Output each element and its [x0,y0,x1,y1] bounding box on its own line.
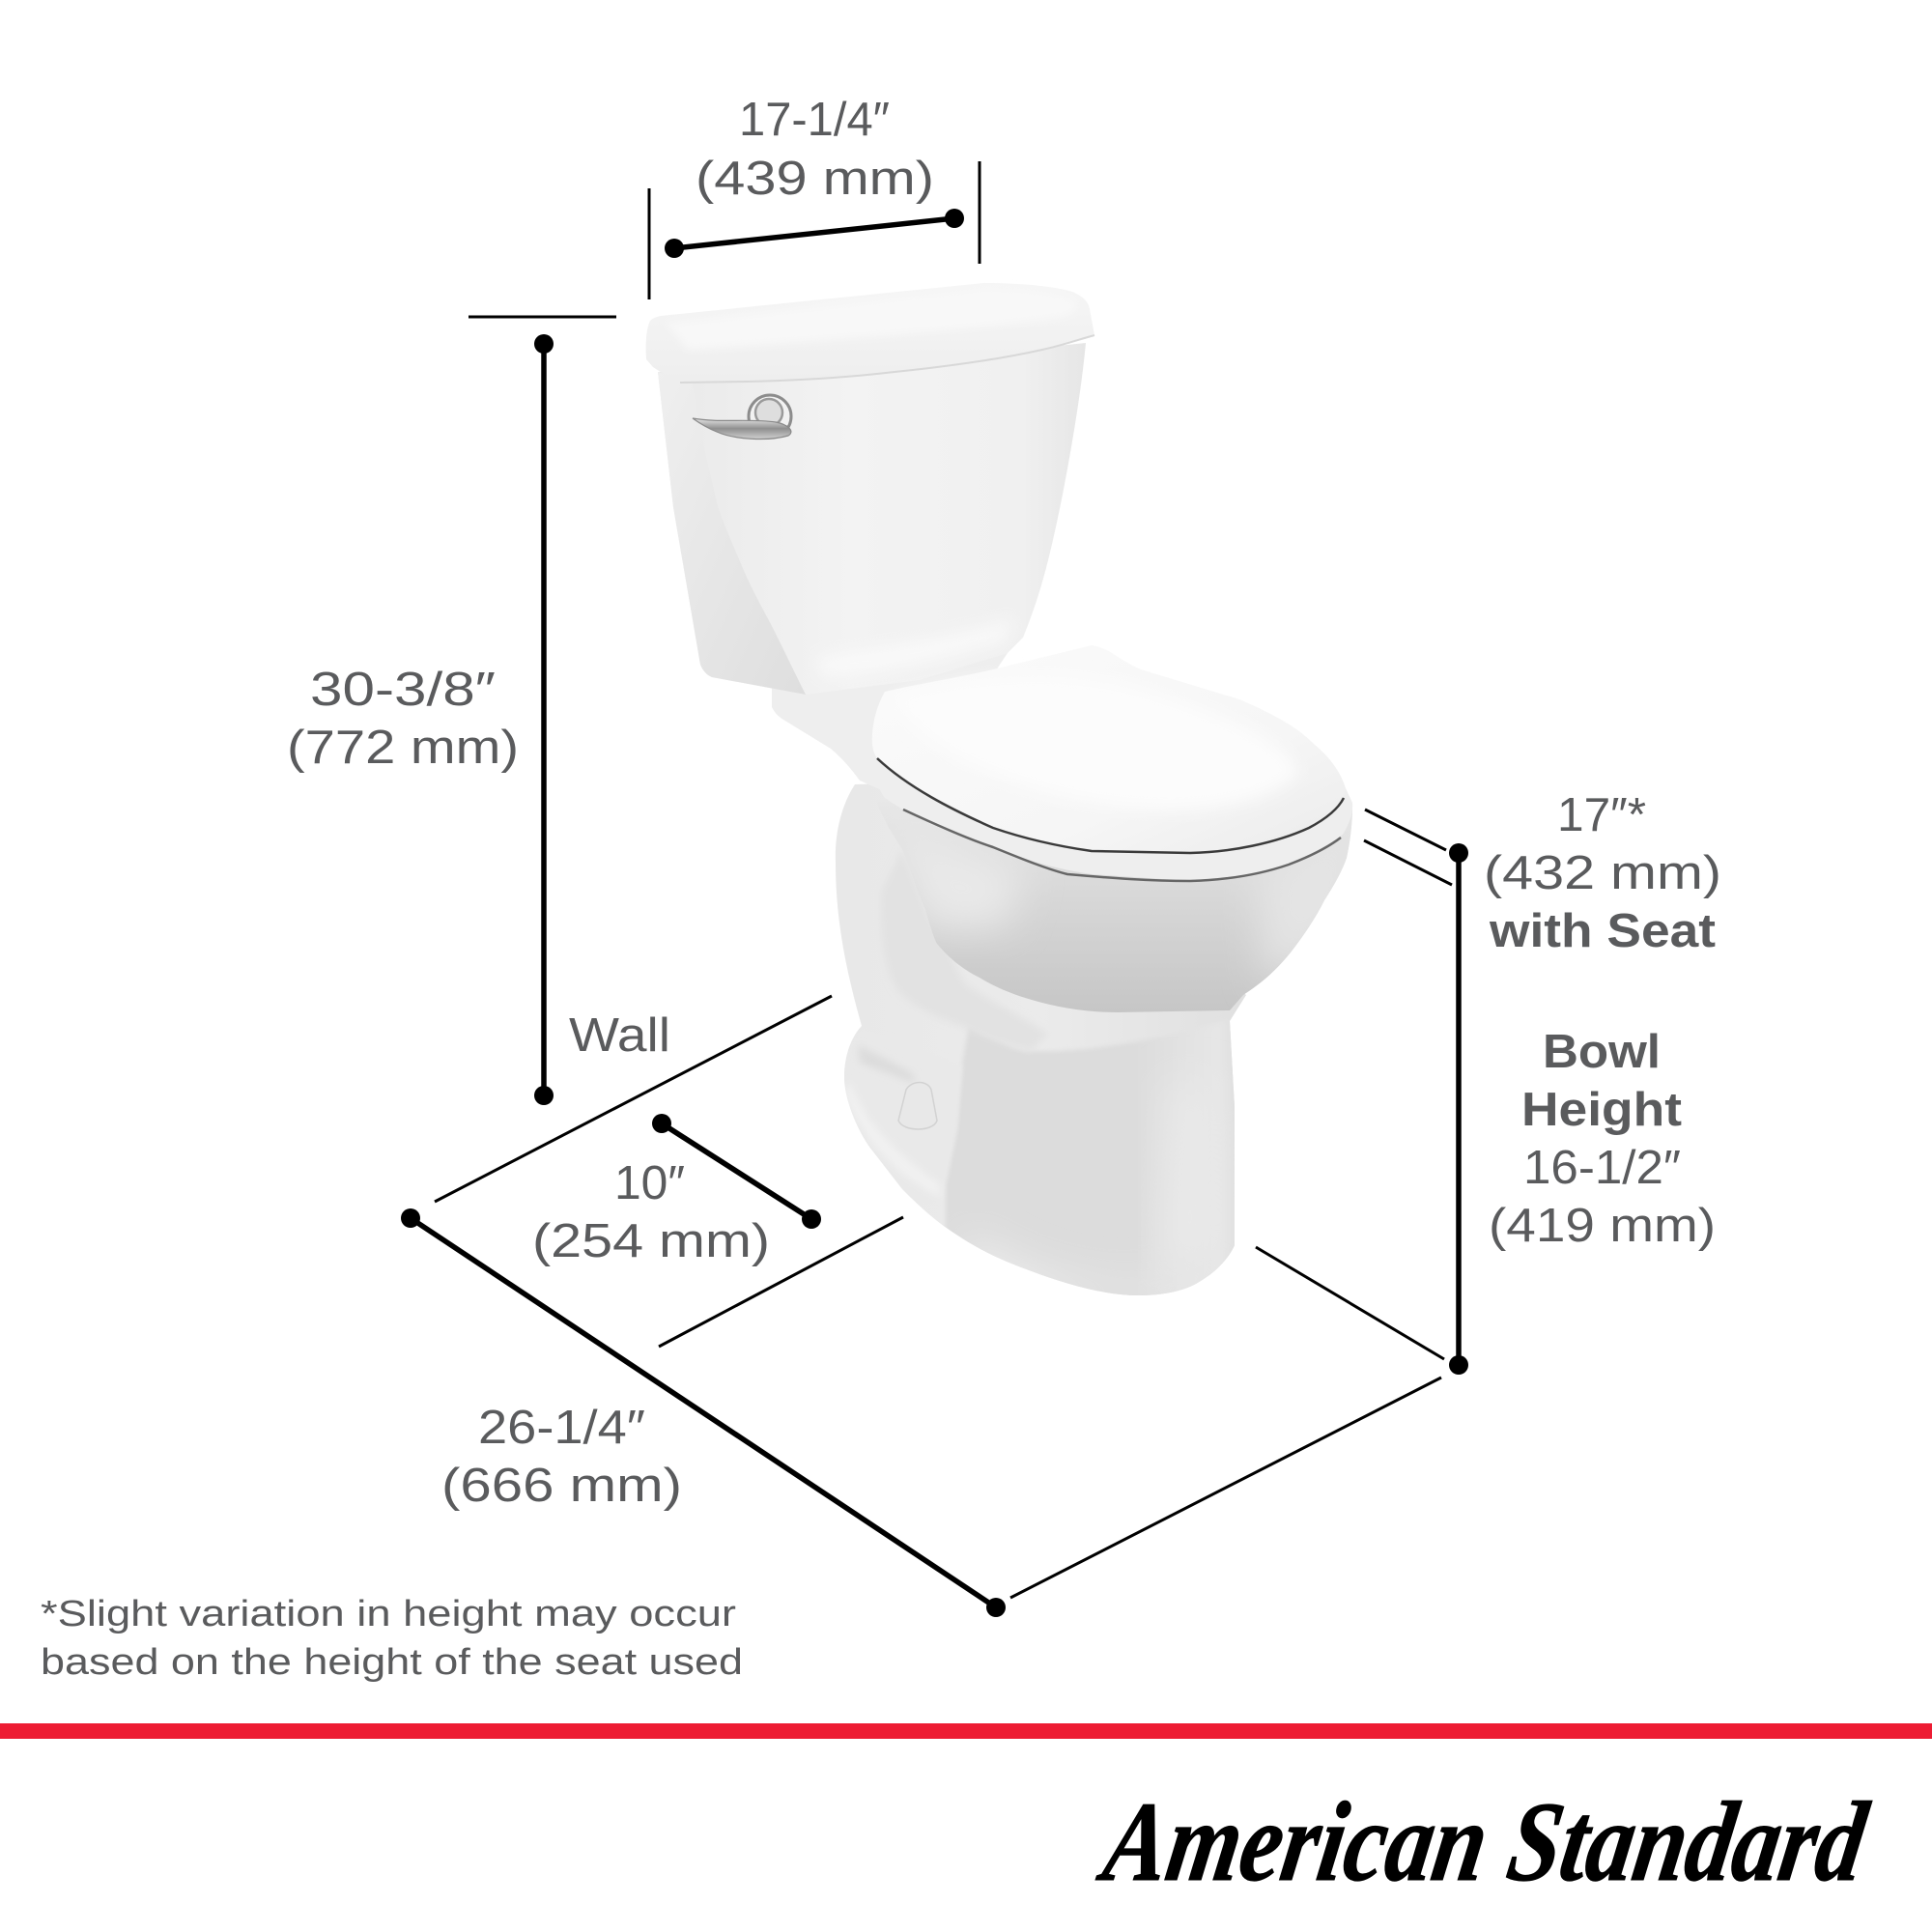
seat ring [872,734,1352,881]
tank left facet [658,372,806,695]
height label: (772 mm) [287,722,519,774]
bowl left light [889,821,1024,927]
depth label: (666 mm) [441,1460,682,1512]
foot ledge shade [858,1045,916,1084]
height label: 30-3/8″ [310,664,496,716]
base foot flange [844,1030,962,1204]
rough-in label: 10″ [614,1157,685,1209]
top tick [469,315,616,319]
footnote [41,1594,743,1683]
wall label: Wall [569,1009,670,1062]
toilet illustration [646,283,1372,1304]
seat top tick [1365,810,1446,850]
seat gap line [877,758,1344,853]
pedestal floor highlight [966,1232,1217,1299]
tank left tick [647,188,651,299]
foot bolt cap [898,1082,937,1129]
height label [287,664,519,774]
tank width label [696,94,934,205]
bowl height arrow [1449,843,1468,1375]
depth label: 26-1/4″ [478,1402,645,1454]
flush handle [693,395,791,439]
rim tick [1364,840,1452,885]
handle escutcheon [749,395,791,438]
foot lower rim [844,1082,942,1198]
footnote: *Slight variation in height may occur [41,1594,736,1634]
footnote: based on the height of the seat used [41,1642,743,1683]
seat height label [1484,789,1721,957]
handle hub [755,399,782,426]
dimension: rough-in [435,996,903,1347]
bowl height label: Bowl [1543,1026,1661,1078]
bowl height label: (419 mm) [1489,1200,1716,1252]
tank width label: 17-1/4″ [739,94,890,146]
bowl height label [1489,1026,1716,1252]
flush lever [693,418,791,439]
wall line [435,996,832,1202]
tank lid [646,283,1094,383]
bowl height label: 16-1/2″ [1523,1142,1681,1194]
lid front edge line [680,335,1094,383]
toilet base and trapway [836,782,1256,1304]
floor tick [1256,1247,1444,1359]
pedestal front [844,849,1256,1304]
ring gap line [903,810,1341,881]
rough-in label [532,1157,770,1267]
seat height label: with Seat [1489,905,1716,957]
front floor line [1010,1378,1441,1598]
bowl height label: Height [1521,1084,1682,1136]
seat lid dished shade [894,676,1299,810]
dimension: overall depth [401,1208,1441,1617]
rough-in bolt line [659,1217,903,1347]
bowl [869,792,1372,1019]
dimension: seat height [1256,789,1721,1375]
rough-in label: (254 mm) [532,1215,770,1267]
depth label [441,1402,682,1512]
tank right tick [978,161,981,264]
seat lid [872,645,1346,853]
depth arrow [401,1208,1006,1617]
dimension: overall height [287,317,616,1105]
trap recess shade [881,849,1049,1051]
height arrow [534,334,554,1105]
seat height label: 17″* [1557,789,1646,841]
rough-in arrow [652,1114,821,1229]
tank neck [772,653,1008,802]
pedestal right highlight [1159,1082,1219,1275]
bowl right light [1256,802,1372,985]
tank width label: (439 mm) [696,153,934,205]
red divider bar [0,1723,1932,1739]
tank body [658,343,1086,695]
lid top highlight [667,288,1076,350]
dimension: tank width [649,94,980,299]
bowl fill [869,792,1362,1019]
seat height label: (432 mm) [1484,847,1721,899]
tank width arrow [665,209,964,258]
tank lower shading [816,618,1014,676]
